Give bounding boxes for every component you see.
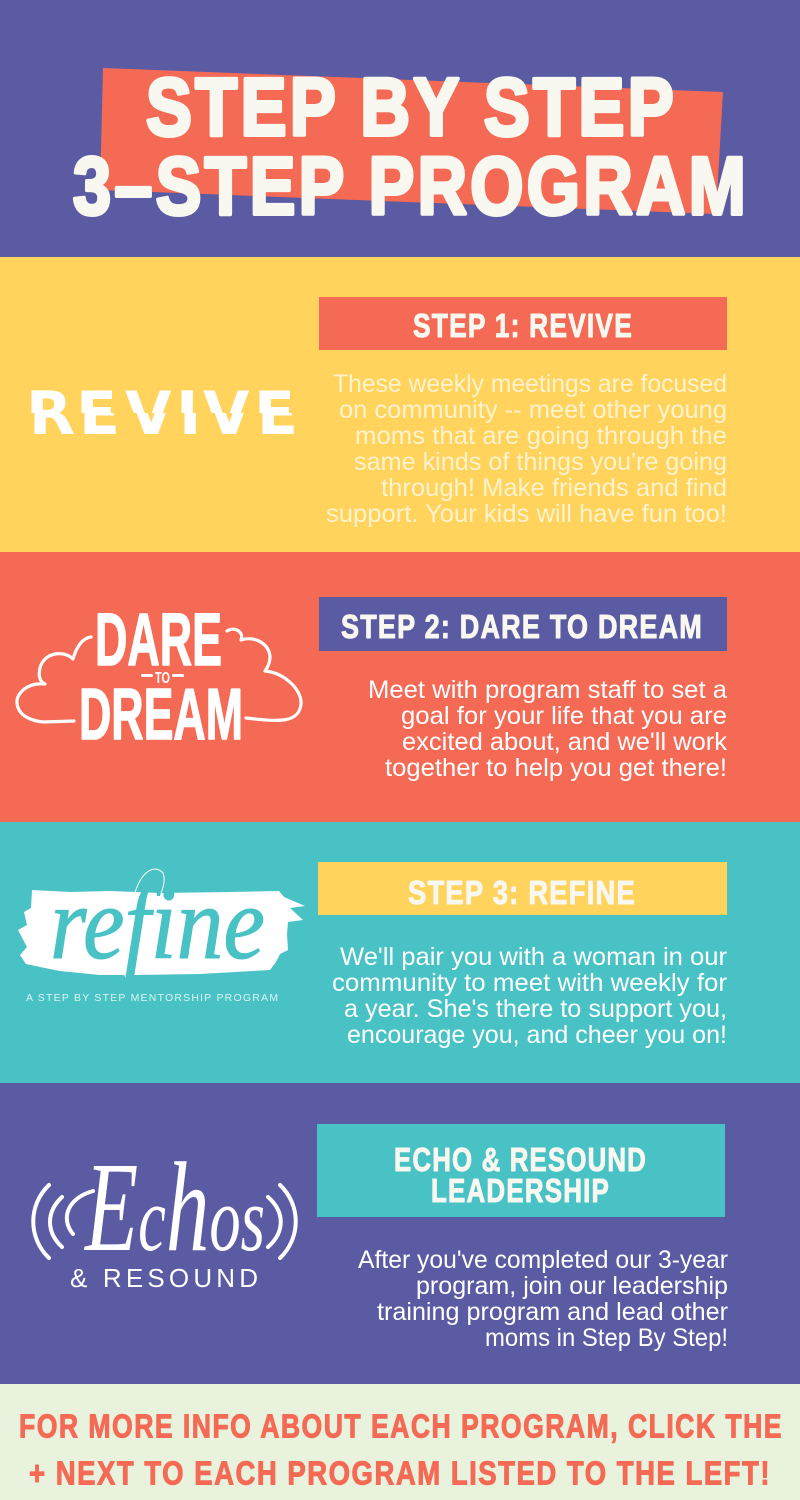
leadership description: moms in Step By Step! <box>485 1324 728 1352</box>
step 2 description: goal for your life that you are <box>401 702 727 730</box>
leadership description: training program and lead other <box>377 1298 728 1326</box>
leadership heading: LEADERSHIP <box>431 1172 610 1209</box>
title <box>73 62 749 232</box>
step 3 description: a year. She's there to support you, <box>344 995 727 1023</box>
white brush stroke <box>18 890 305 975</box>
step 1 description: same kinds of things you're going <box>354 448 727 476</box>
step 2 description: together to help you get there! <box>385 754 727 782</box>
cloud outline <box>17 629 301 722</box>
logo: echos and resound <box>33 1136 296 1293</box>
panel: footer call to action <box>0 1384 800 1500</box>
panel: echo and resound leadership <box>0 1083 800 1384</box>
step 3 description: community to meet with weekly for <box>332 969 727 997</box>
leadership heading: ECHO & RESOUND <box>394 1141 647 1178</box>
mentorship tagline: A STEP BY STEP MENTORSHIP PROGRAM <box>26 992 278 1004</box>
step 1 description: support. Your kids will have fun too! <box>326 500 727 528</box>
panel: step 3 refine <box>0 822 800 1083</box>
title brush background <box>100 68 723 214</box>
leadership description: program, join our leadership <box>416 1272 728 1300</box>
step 2 description: excited about, and we'll work <box>402 728 728 756</box>
logo lettering: DARE <box>95 598 222 681</box>
step 3 description: encourage you, and cheer you on! <box>347 1021 727 1049</box>
title: STEP BY STEP <box>146 62 677 153</box>
leadership description: After you've completed our 3-year <box>358 1246 728 1274</box>
sound wave arcs <box>33 1185 296 1258</box>
step 2 heading: STEP 2: DARE TO DREAM <box>341 608 703 645</box>
f loop outline <box>122 869 164 980</box>
echos lettering: Echos <box>84 1136 265 1278</box>
step 1 description: moms that are going through the <box>355 422 727 450</box>
step 2 description <box>368 676 728 782</box>
logo lettering: DREAM <box>79 675 243 755</box>
logo: dare to dream <box>17 598 301 755</box>
step 1 heading: STEP 1: REVIVE <box>413 307 633 344</box>
logo: revive: REVIVE <box>29 379 298 449</box>
step 3 description <box>332 943 727 1049</box>
logo lettering: TO <box>155 670 170 687</box>
step 1 description: on community -- meet other young <box>339 396 727 424</box>
step 1 heading <box>319 297 727 350</box>
step 3 heading: STEP 3: REFINE <box>408 874 636 911</box>
panel: title header <box>0 0 800 257</box>
logo: revive: REVIVE <box>26 379 295 449</box>
step 1 description: through! Make friends and find <box>381 474 727 502</box>
step 2 description: Meet with program staff to set a <box>368 676 727 704</box>
step 2 heading <box>319 597 727 651</box>
panel: step 1 revive <box>0 257 800 552</box>
refine lettering: refine <box>50 866 265 981</box>
leadership heading <box>317 1124 725 1217</box>
step 3 heading <box>318 862 727 915</box>
panel: step 2 dare to dream <box>0 552 800 822</box>
step 1 description: These weekly meetings are focused <box>333 370 727 398</box>
footer text <box>19 1408 783 1492</box>
step 3 description: We'll pair you with a woman in our <box>340 943 727 971</box>
logo lettering <box>79 598 243 755</box>
resound lettering: & RESOUND <box>70 1263 258 1293</box>
logo: revive <box>32 390 294 434</box>
logo: refine <box>18 866 305 1004</box>
step 1 description <box>326 370 727 528</box>
leadership description <box>358 1246 728 1352</box>
